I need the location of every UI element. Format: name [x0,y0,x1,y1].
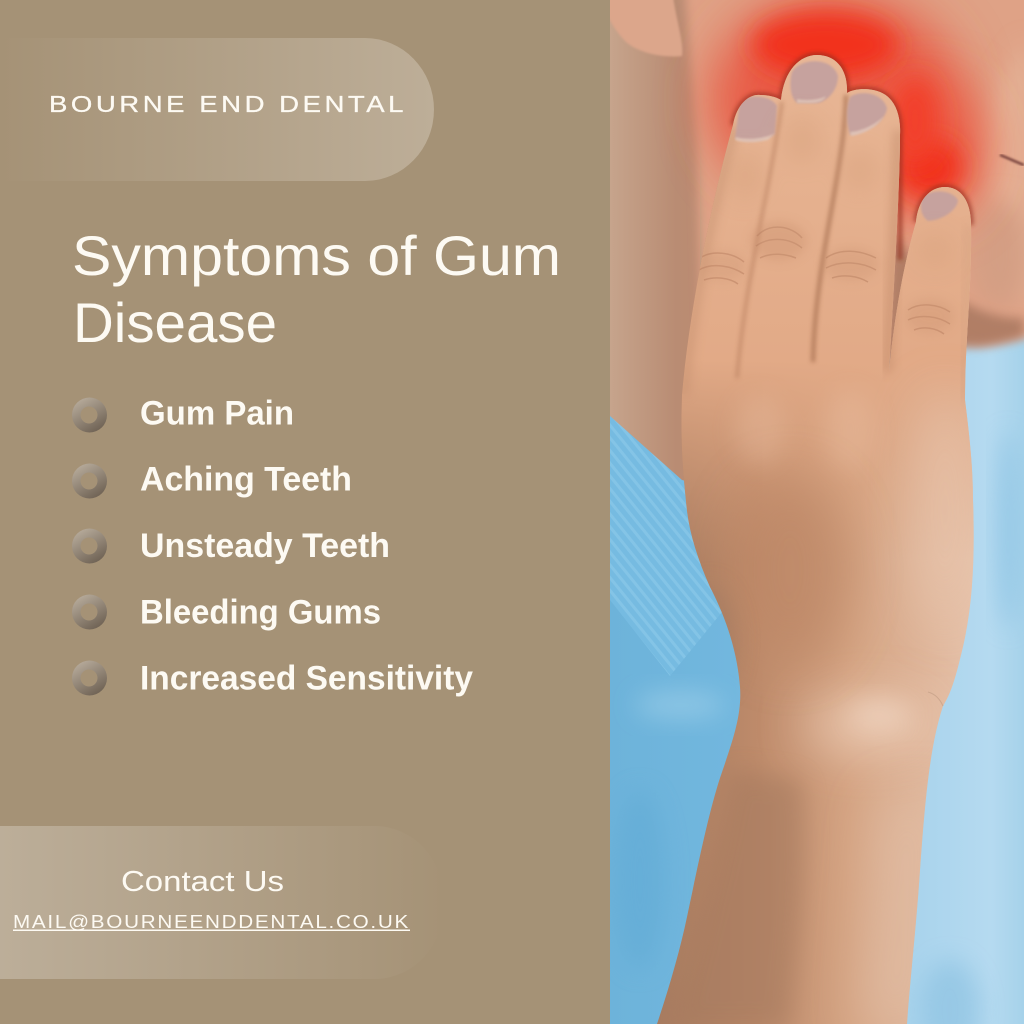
back of hand tone [774,487,856,644]
bullet: aching teeth [72,464,107,498]
knuckles [698,221,954,334]
wrist highlight [805,697,935,753]
bullet: gum pain [72,398,107,432]
hand tendon tones [740,404,864,460]
email address: MAIL@BOURNEENDDENTAL.CO.UK [13,912,410,932]
header pill with brand name [0,38,434,181]
title [72,224,561,354]
bullet: unsteady teeth [72,528,107,564]
photo: hand pressing on a painful cheek [606,0,1024,1024]
email underline [13,930,410,931]
bullet: bleeding gums [72,594,107,630]
symptom: unsteady teeth: Unsteady Teeth [140,527,390,565]
pain glow [710,0,985,220]
symptom: aching teeth: Aching Teeth [140,460,352,498]
shirt collar [610,416,722,676]
title: Disease [73,291,277,354]
nail tips [735,96,884,142]
left panel background [0,0,611,1024]
symptom: bleeding gums: Bleeding Gums [140,594,381,632]
cheek tone right [989,62,1024,214]
face and cheek [682,0,1024,358]
lips [1000,155,1024,165]
nails [735,61,958,221]
symptom: increased sensitivity: Increased Sensitivity [140,660,473,698]
finger joint tones [796,134,808,144]
contact heading: Contact Us [121,866,284,898]
forearm light side [856,818,914,1020]
wrist crease [928,692,943,706]
shirt [610,330,1024,1024]
finger edge shading [887,130,898,372]
jaw shadow [889,236,1024,367]
bullet: increased sensitivity [72,660,107,696]
symptom: gum pain: Gum Pain [140,394,294,432]
lower face tone [977,202,1024,299]
neck [610,0,700,485]
hand right tone [908,404,970,552]
hand and forearm [650,50,980,1024]
ear [606,0,682,56]
brand name: BOURNE END DENTAL [49,91,407,117]
contact pill [0,826,445,979]
finger gaps [737,102,782,378]
symptom list [72,394,473,698]
fingertip shadow on cheek [733,55,971,260]
title: Symptoms of Gum [72,224,561,287]
forearm shade [706,774,808,1024]
